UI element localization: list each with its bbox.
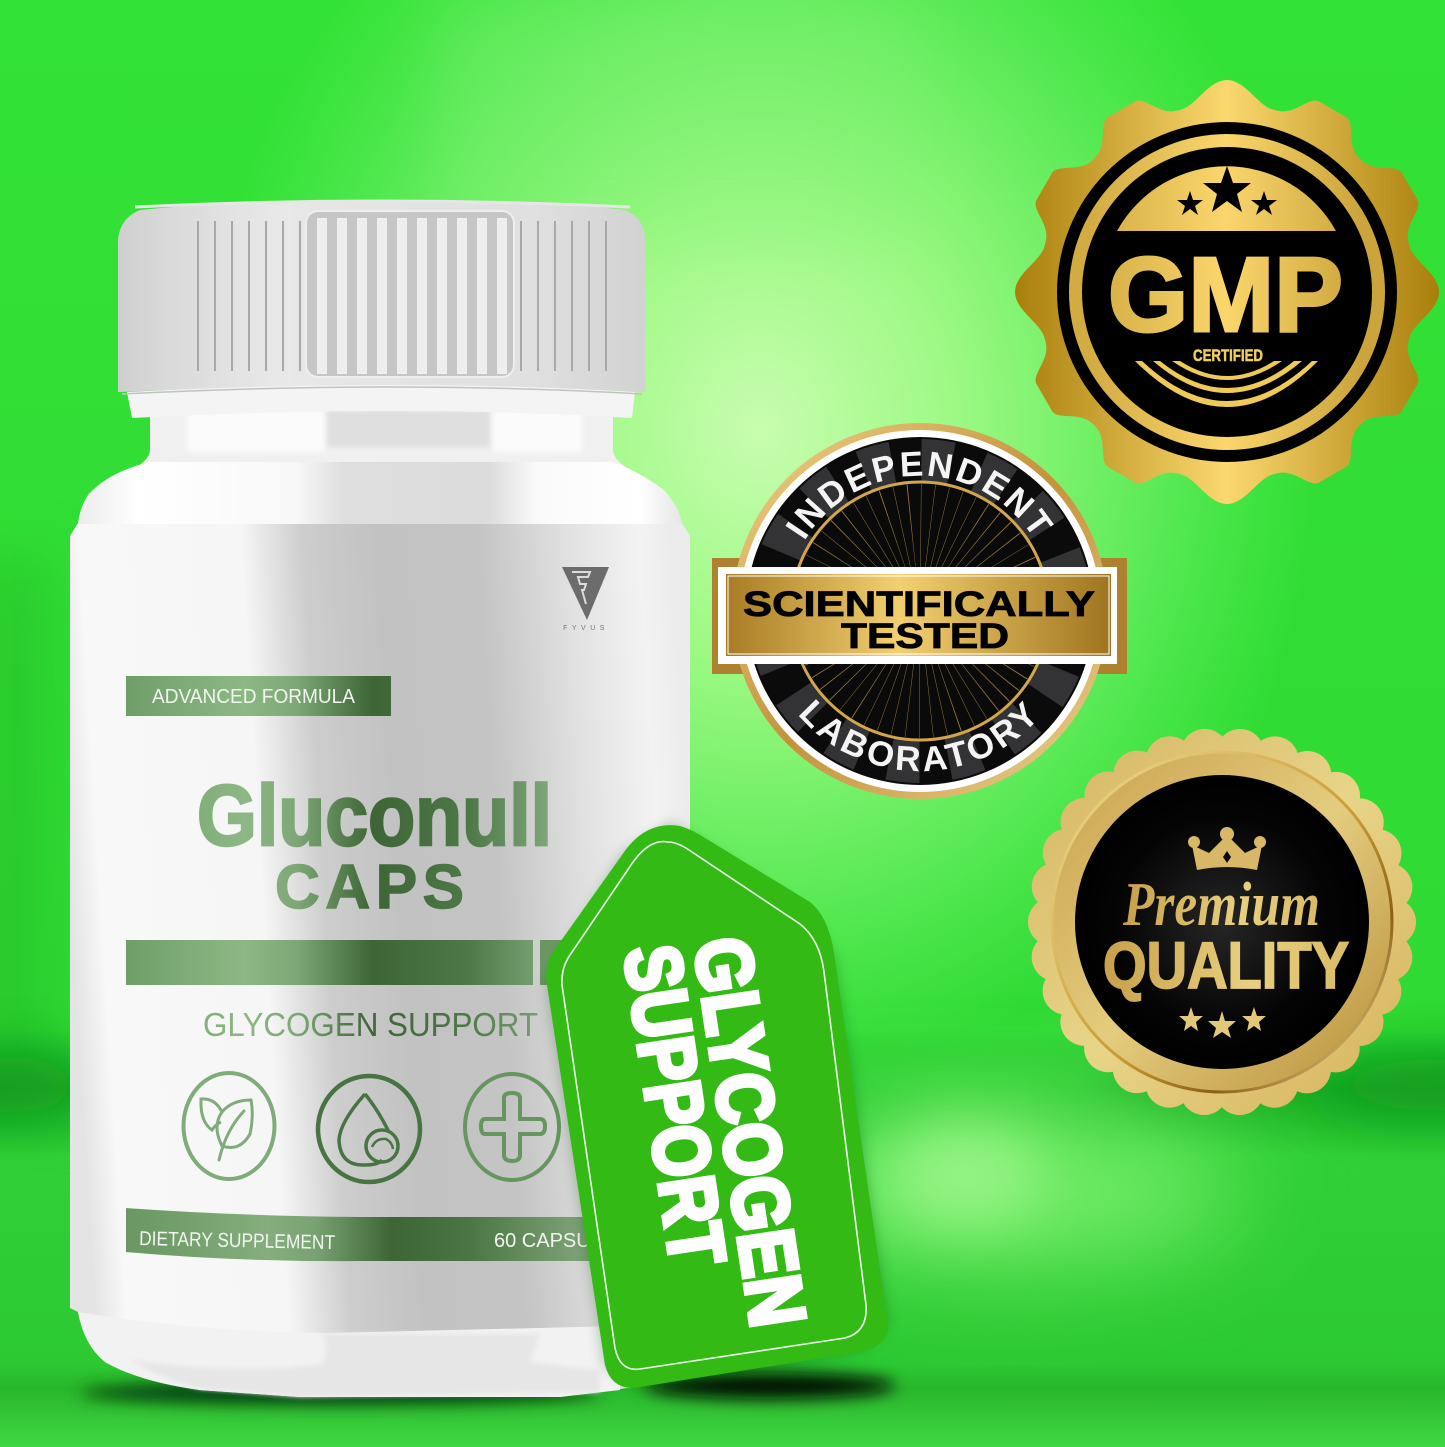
price tag: glycogen support bbox=[546, 825, 888, 1388]
GMP dome with stars bbox=[1117, 166, 1336, 231]
product bottle bbox=[70, 200, 690, 1397]
icon: leaf bbox=[184, 1073, 274, 1179]
three stars bbox=[1179, 1007, 1266, 1038]
badge: scientifically tested bbox=[712, 423, 1127, 799]
tag shadow bbox=[547, 823, 888, 1387]
GMP lettering: GMP bbox=[1108, 236, 1343, 354]
quality lettering: QUALITY bbox=[1103, 928, 1349, 1002]
badge: premium quality bbox=[1052, 752, 1392, 1092]
arc text: independent: INDEPENDENT bbox=[786, 452, 1054, 540]
bottom label band bbox=[126, 1208, 629, 1261]
green label bar bbox=[126, 940, 570, 985]
floor shadow under bottle bbox=[80, 1373, 895, 1404]
icon: plus bbox=[465, 1074, 559, 1180]
icon: drop with gauge bbox=[318, 1076, 420, 1182]
subtitle: GLYCOGEN SUPPORT bbox=[203, 1006, 538, 1043]
label: advanced formula band: ADVANCED FORMULA bbox=[152, 685, 355, 708]
product name: caps: CAPS bbox=[275, 853, 464, 922]
bottle body bbox=[70, 523, 690, 1397]
premium script: Premium bbox=[1122, 871, 1320, 939]
icon: crown bbox=[1188, 827, 1266, 870]
ribbon banner bbox=[718, 567, 1117, 664]
tag text: glycogen: GLYCOGEN bbox=[677, 931, 823, 1332]
badge: GMP certified bbox=[1010, 75, 1445, 510]
label: advanced formula band bbox=[126, 676, 391, 716]
logo: FYVUS bbox=[562, 567, 609, 632]
scalloped edge bbox=[1052, 752, 1392, 1092]
banner text: SCIENTIFICALLY bbox=[743, 585, 1095, 624]
certified arcs bbox=[1135, 361, 1318, 407]
arc text: laboratory: LABORATORY bbox=[798, 699, 1034, 772]
tag text: support: SUPPORT bbox=[607, 939, 743, 1271]
bottom label band: 60 CAPSULES bbox=[494, 1230, 629, 1252]
bottle shoulder highlight bbox=[78, 462, 682, 524]
ribbon tails bbox=[712, 558, 1127, 674]
bottle neck bbox=[122, 405, 640, 475]
bottom label band: DIETARY SUPPLEMENT bbox=[139, 1228, 335, 1254]
product name: Gluconull bbox=[197, 768, 552, 864]
certified text: CERTIFIED bbox=[1193, 346, 1263, 365]
bottle cap bbox=[118, 200, 645, 418]
logo: FYVUS: FYVUS bbox=[563, 625, 609, 632]
banner text: TESTED bbox=[841, 617, 1009, 656]
bottle base bbox=[78, 1312, 620, 1397]
